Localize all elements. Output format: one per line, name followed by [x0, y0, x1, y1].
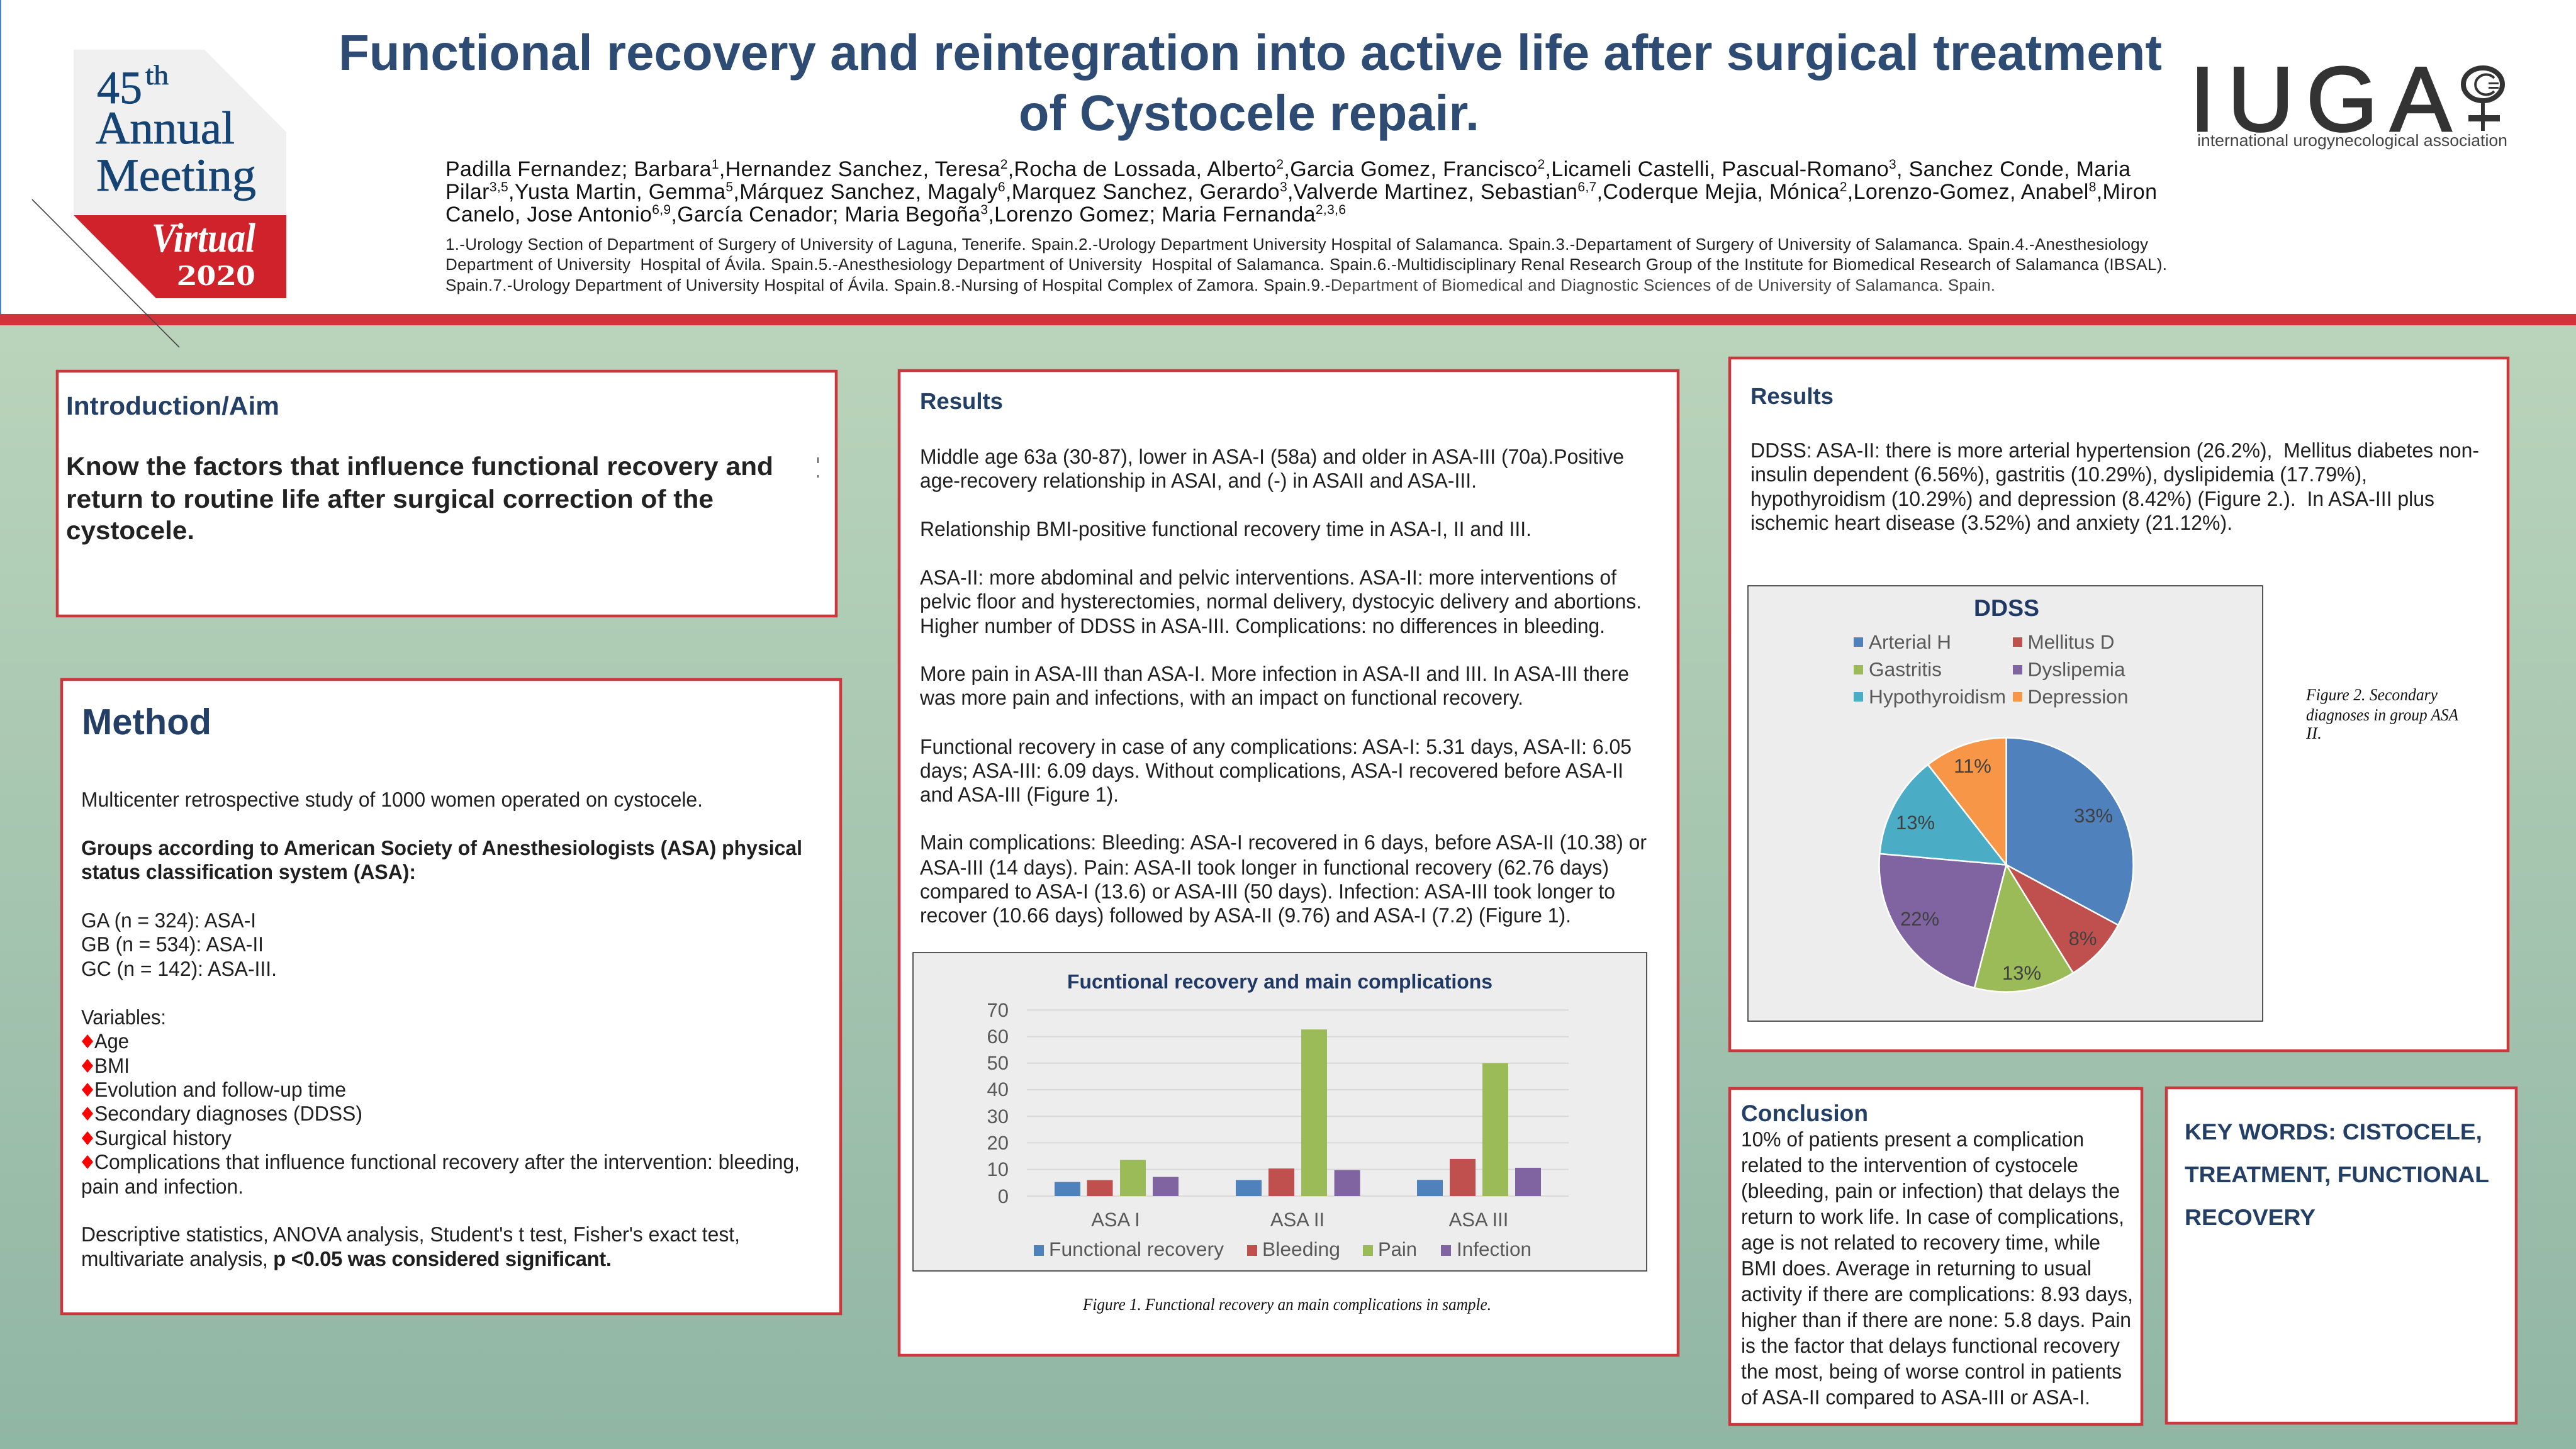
- pie chart legend: Hypothyroidism: [1869, 686, 2006, 708]
- results text: days; ASA-III: 6.09 days. Without complications, ASA-I recovered before ASA-II: [920, 759, 1623, 782]
- group sizes: GA (n = 324): ASA-I: [81, 909, 256, 932]
- authors: Pilar: [445, 180, 489, 204]
- authors: 2: [1276, 157, 1284, 172]
- bars: infection: [1153, 1168, 1541, 1196]
- pie chart legend: Depression: [2027, 686, 2128, 708]
- conclusion text: age is not related to recovery time, while: [1741, 1231, 2100, 1254]
- authors: ,Valverde Martinez, Sebastian: [1287, 180, 1577, 204]
- key words text: KEY WORDS: CISTOCELE,: [2185, 1119, 2482, 1144]
- key words text: RECOVERY: [2185, 1204, 2316, 1230]
- authors: 3: [980, 203, 988, 217]
- conclusion text: is the factor that delays functional recovery: [1741, 1334, 2120, 1357]
- results text: More pain in ASA-III than ASA-I. More infection in ASA-II and III. In ASA-III there: [920, 662, 1629, 685]
- authors: ,Lorenzo Gomez; Maria Fernanda: [988, 203, 1316, 227]
- panel: results left: [899, 371, 1678, 1355]
- group sizes: [81, 909, 277, 980]
- authors: , Sanchez Conde, Maria: [1896, 157, 2131, 181]
- aim statement: [66, 452, 773, 545]
- bar chart legend: [1034, 1238, 1532, 1260]
- affiliations: Department of University Hospital of Ávila. Spain.5.-Anesthesiology Department of University Hospital of Salamanca. Spain.6.-Multidisciplinary Renal Research Group of the Institute for Biomedical Research of Salamanca (IBSAL).: [445, 255, 2167, 274]
- heading: conclusion: Conclusion: [1741, 1100, 1868, 1126]
- logo letters: IUGA: [2190, 48, 2452, 150]
- DDSS text: hypothyroidism (10.29%) and depression (8.42%) (Figure 2.). In ASA-III plus: [1750, 487, 2434, 510]
- IUGA logo: [2190, 48, 2507, 150]
- figure 2 caption: diagnoses in group ASA: [2306, 705, 2458, 724]
- badge year: 2020: [177, 259, 255, 292]
- bar chart x axis: ASA I: [1091, 1209, 1140, 1231]
- method description: Multicenter retrospective study of 1000 women operated on cystocele.: [81, 788, 703, 811]
- bar chart legend: Infection: [1457, 1238, 1532, 1260]
- results text: [919, 445, 1647, 927]
- results text: compared to ASA-I (13.6) or ASA-III (50 days). Infection: ASA-III took longer to: [920, 880, 1615, 903]
- header red band: [0, 314, 2576, 325]
- logo female symbol: [2463, 68, 2502, 131]
- bar chart y axis: 10: [987, 1158, 1009, 1180]
- DDSS text: [1750, 439, 2479, 534]
- variables list: Evolution and follow-up time: [94, 1078, 346, 1101]
- bar chart y axis: 40: [987, 1078, 1009, 1100]
- results text: Main complications: Bleeding: ASA-I recovered in 6 days, before ASA-II (10.38) or: [920, 831, 1647, 854]
- title: of Cystocele repair.: [1019, 85, 1479, 141]
- pie labels: 13%: [1896, 812, 1935, 834]
- bars: functional recovery: [1055, 1180, 1443, 1196]
- authors: 5: [725, 180, 733, 194]
- conclusion text: (bleeding, pain or infection) that delays the: [1741, 1179, 2120, 1202]
- conclusion text: activity if there are complications: 8.93 days,: [1741, 1282, 2133, 1306]
- figure 2 caption: Figure 2. Secondary: [2305, 685, 2438, 704]
- badge word annual: Annual: [96, 103, 235, 154]
- variables list: Complications that influence functional recovery after the intervention: bleeding,: [94, 1150, 800, 1173]
- results text: age-recovery relationship in ASAI, and (-) in ASAII and ASA-III.: [920, 469, 1477, 492]
- conclusion text: 10% of patients present a complication: [1741, 1127, 2084, 1151]
- authors: ,Marquez Sanchez, Gerardo: [1005, 180, 1280, 204]
- panel: conclusion: [1730, 1088, 2142, 1424]
- authors: 6,7: [1577, 180, 1596, 194]
- heading: results: Results: [1750, 383, 1834, 409]
- bar chart: functional recovery and main complications: [913, 953, 1647, 1271]
- DDSS text: ischemic heart disease (3.52%) and anxiety (21.12%).: [1750, 511, 2232, 534]
- conclusion text: [1741, 1127, 2133, 1409]
- authors: 2,3,6: [1316, 203, 1346, 217]
- bar chart y axis: 0: [998, 1185, 1009, 1207]
- authors: 2: [1538, 157, 1545, 172]
- authors: ,Yusta Martin, Gemma: [508, 180, 725, 204]
- bar chart title: Fucntional recovery and main complications: [1067, 970, 1492, 993]
- bar chart x axis: ASA II: [1270, 1209, 1324, 1231]
- pie chart legend: Arterial H: [1869, 631, 1951, 653]
- results text: ASA-II: more abdominal and pelvic interventions. ASA-II: more interventions of: [920, 566, 1617, 589]
- results text: Relationship BMI-positive functional recovery time in ASA-I, II and III.: [920, 517, 1532, 540]
- bar chart legend: Functional recovery: [1049, 1238, 1224, 1260]
- pie labels: 13%: [2002, 962, 2041, 984]
- bar chart y axis: 70: [987, 999, 1009, 1021]
- conclusion text: BMI does. Average in returning to usual: [1741, 1256, 2092, 1280]
- results text: ASA-III (14 days). Pain: ASA-II took longer in functional recovery (62.76 days): [920, 856, 1609, 879]
- authors: 8: [2089, 180, 2096, 194]
- bars: pain: [1120, 1029, 1508, 1196]
- authors: ,Miron: [2097, 180, 2157, 204]
- authors: ,Márquez Sanchez, Magaly: [733, 180, 998, 204]
- heading: introduction: Introduction/Aim: [66, 391, 279, 420]
- badge word meeting: Meeting: [96, 150, 256, 201]
- authors: ,Hernandez Sanchez, Teresa: [719, 157, 1000, 181]
- bar chart y axis: 30: [987, 1105, 1009, 1127]
- diagonal line: [32, 199, 179, 347]
- conference badge: [74, 50, 286, 298]
- aim statement: cystocele.: [66, 516, 194, 545]
- bar chart x axis: [1091, 1209, 1508, 1231]
- authors: ,Garcia Gomez, Francisco: [1284, 157, 1537, 181]
- conclusion text: related to the intervention of cystocele: [1741, 1153, 2078, 1177]
- authors: ,Licameli Castelli, Pascual-Romano: [1545, 157, 1889, 181]
- badge ordinal: [97, 60, 169, 114]
- figure 2 caption: II.: [2305, 724, 2322, 742]
- badge ordinal: th: [145, 60, 169, 91]
- aim statement: return to routine life after surgical correction of the: [66, 484, 714, 513]
- pie labels: 33%: [2074, 805, 2113, 827]
- authors: 6,9: [652, 203, 671, 217]
- pie labels: 11%: [1954, 755, 1991, 777]
- panel: results right: [1730, 358, 2508, 1051]
- statistics statement: multivariate analysis, p <0.05 was considered significant.: [81, 1247, 612, 1270]
- authors: 1: [712, 157, 719, 172]
- authors: ,Lorenzo-Gomez, Anabel: [1847, 180, 2088, 204]
- group sizes: GC (n = 142): ASA-III.: [81, 957, 277, 980]
- conclusion text: return to work life. In case of complications,: [1741, 1205, 2124, 1228]
- variables list: Variables:: [81, 1005, 166, 1029]
- authors: Canelo, Jose Antonio: [445, 203, 652, 227]
- bars: bleeding: [1087, 1159, 1476, 1196]
- pie slices: [1879, 737, 2134, 992]
- bar chart y axis: 20: [987, 1132, 1009, 1154]
- bar chart y axis: 60: [987, 1026, 1009, 1048]
- conclusion text: of ASA-II compared to ASA-III or ASA-I.: [1741, 1385, 2090, 1409]
- figure 1 caption: Figure 1. Functional recovery an main complications in sample.: [1082, 1295, 1491, 1314]
- results text: Middle age 63a (30-87), lower in ASA-I (58a) and older in ASA-III (70a).Positive: [920, 445, 1624, 468]
- bar chart x axis: ASA III: [1449, 1209, 1508, 1231]
- figure 2 caption: [2305, 685, 2458, 742]
- conclusion text: the most, being of worse control in patients: [1741, 1360, 2122, 1383]
- statistics statement: [81, 1222, 740, 1270]
- key words text: TREATMENT, FUNCTIONAL: [2185, 1161, 2489, 1187]
- variables list: Surgical history: [94, 1126, 232, 1150]
- authors: ,García Cenador; Maria Begoña: [671, 203, 980, 227]
- authors: 3: [1889, 157, 1896, 172]
- bar chart y axis: 50: [987, 1052, 1009, 1074]
- badge grey panel: [74, 50, 286, 215]
- panel: introduction and aim: [57, 371, 836, 616]
- authors: 3: [1280, 180, 1287, 194]
- title: [339, 25, 2162, 141]
- variables list: pain and infection.: [81, 1175, 244, 1198]
- results text: Functional recovery in case of any complications: ASA-I: 5.31 days, ASA-II: 6.05: [920, 735, 1632, 758]
- authors: 2: [1840, 180, 1847, 194]
- heading: results: Results: [920, 388, 1003, 414]
- authors: [445, 157, 2157, 227]
- results text: pelvic floor and hysterectomies, normal delivery, dystocyic delivery and abortions.: [920, 590, 1642, 613]
- variables list: Age: [94, 1029, 129, 1053]
- results text: Higher number of DDSS in ASA-III. Complications: no differences in bleeding.: [920, 614, 1605, 637]
- bar chart legend: Bleeding: [1262, 1238, 1340, 1260]
- badge ordinal: 45: [97, 62, 142, 114]
- panel: method: [62, 680, 841, 1314]
- groups statement: Groups according to American Society of Anesthesiologists (ASA) physical: [81, 836, 802, 859]
- bar chart y axis: [987, 999, 1009, 1207]
- group sizes: GB (n = 534): ASA-II: [81, 932, 264, 956]
- authors: 3,5: [490, 180, 508, 194]
- title: Functional recovery and reintegration into active life after surgical treatment: [339, 25, 2162, 81]
- pie chart legend: Gastritis: [1869, 658, 1942, 681]
- pie chart: DDSS: [1748, 586, 2263, 1021]
- heading: method: Method: [82, 702, 211, 742]
- panel: key words: [2166, 1088, 2516, 1423]
- key words text: [2185, 1119, 2489, 1230]
- authors: 2: [1000, 157, 1007, 172]
- variables list: Secondary diagnoses (DDSS): [94, 1102, 362, 1125]
- pie labels: [1896, 755, 2113, 984]
- pie labels: 22%: [1900, 908, 1939, 930]
- variables list: BMI: [94, 1054, 130, 1077]
- authors: 6: [998, 180, 1005, 194]
- pie chart legend: Dyslipemia: [2027, 658, 2125, 681]
- authors: ,Coderque Mejia, Mónica: [1597, 180, 1839, 204]
- authors: ,Rocha de Lossada, Alberto: [1008, 157, 1276, 181]
- pie chart legend: Mellitus D: [2027, 631, 2114, 653]
- authors: Padilla Fernandez; Barbara: [445, 157, 712, 181]
- variables list: [81, 1005, 800, 1198]
- conclusion text: higher than if there are none: 5.8 days. Pain: [1741, 1308, 2131, 1331]
- DDSS text: DDSS: ASA-II: there is more arterial hypertension (26.2%), Mellitus diabetes non-: [1750, 439, 2479, 462]
- results text: recover (10.66 days) followed by ASA-II (9.76) and ASA-I (7.2) (Figure 1).: [920, 904, 1571, 927]
- affiliations: Spain.7.-Urology Department of University Hospital of Ávila. Spain.8.-Nursing of Hospital Complex of Zamora. Spain.9.-Department of Biomedical and Diagnostic Sciences of de University of Salamanca. Spain.: [445, 276, 1995, 294]
- affiliations: 1.-Urology Section of Department of Surgery of University of Laguna, Tenerife. Spain.2.-Urology Department University Hospital of Salamanca. Spain.3.-Departament of Surgery of University of Salamanca. Spain.4.-Anesthesiology: [445, 235, 2148, 254]
- pie labels: 8%: [2069, 927, 2097, 949]
- bar chart legend: Pain: [1378, 1238, 1417, 1260]
- badge red panel: [74, 215, 286, 298]
- affiliations: [445, 235, 2167, 294]
- DDSS text: insulin dependent (6.56%), gastritis (10.29%), dyslipidemia (17.79%),: [1750, 462, 2367, 486]
- groups statement: status classification system (ASA):: [81, 860, 416, 883]
- groups statement: [81, 836, 802, 883]
- results text: was more pain and infections, with an impact on functional recovery.: [919, 686, 1523, 709]
- pie chart title: DDSS: [1974, 595, 2039, 621]
- results text: and ASA-III (Figure 1).: [920, 783, 1119, 806]
- aim statement: Know the factors that influence functional recovery and: [66, 452, 773, 481]
- badge word virtual: Virtual: [152, 215, 256, 261]
- statistics statement: Descriptive statistics, ANOVA analysis, Student's t test, Fisher's exact test,: [81, 1222, 740, 1246]
- pie chart legend: [1854, 631, 2128, 708]
- logo tagline: international urogynecological association: [2197, 131, 2507, 150]
